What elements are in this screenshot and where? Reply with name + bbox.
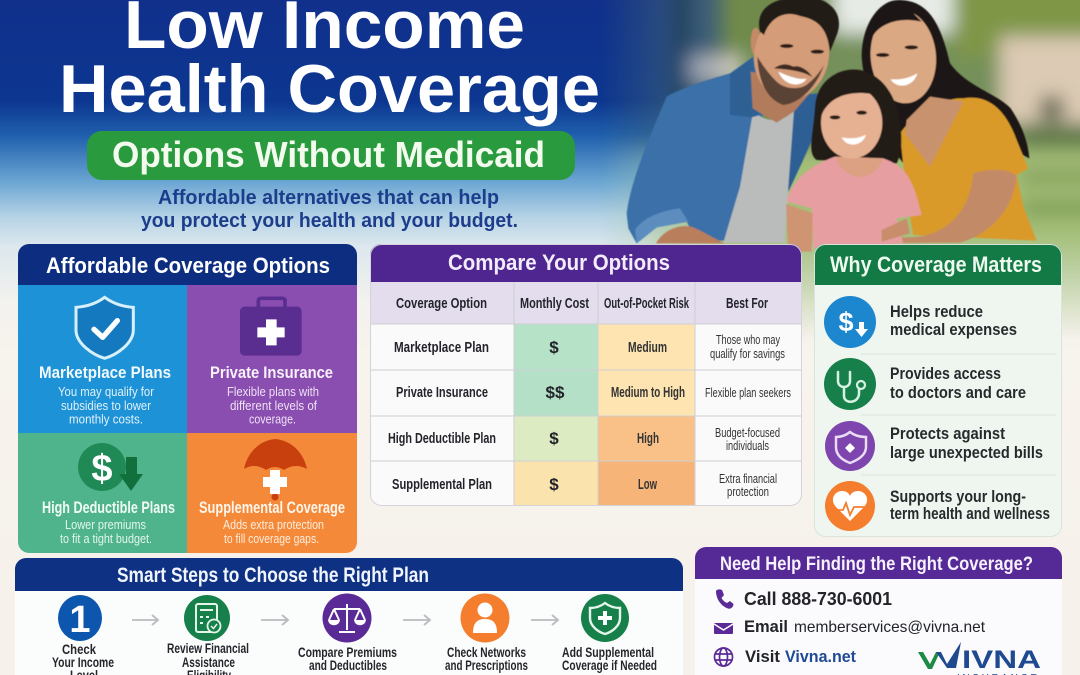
step 3: compare premiums: Compare Premiums bbox=[298, 645, 397, 660]
heading: affordable coverage options: Affordable Coverage Options bbox=[46, 253, 330, 278]
step 2: review assistance bbox=[167, 595, 249, 675]
text: visit bbox=[745, 647, 856, 666]
table row: high deductible plan: High Deductible Plan bbox=[388, 431, 496, 447]
icon: protective shield bbox=[825, 421, 875, 471]
arrow bbox=[531, 615, 558, 625]
heading: smart steps: Smart Steps to Choose the Right Plan bbox=[117, 564, 429, 587]
panel: smart steps bbox=[15, 558, 683, 675]
table header row: Out-of-Pocket Risk bbox=[604, 296, 690, 312]
photo: family outdoors bbox=[614, 0, 1080, 332]
woman bbox=[837, 0, 1037, 243]
card text: high deductible plans: Lower premiums bbox=[65, 517, 146, 532]
card text: private insurance: Private Insurance bbox=[210, 363, 333, 382]
text: email: memberservices@vivna.net bbox=[794, 619, 986, 636]
icon: reduce expenses: $ bbox=[838, 307, 854, 337]
icon: envelope bbox=[714, 623, 733, 634]
step 1: check income: 1 bbox=[69, 599, 91, 641]
icon: dollar with down arrow bbox=[78, 443, 143, 491]
card text: marketplace plans: You may qualify for bbox=[58, 384, 155, 399]
card text: supplemental coverage: Supplemental Coverage bbox=[199, 498, 345, 517]
step 1: check income bbox=[52, 595, 114, 675]
step 4: check networks: Check Networks bbox=[447, 645, 526, 660]
icon: heart with pulse bbox=[825, 481, 875, 531]
logo: vivna insurance bbox=[918, 642, 1041, 675]
icon: globe bbox=[714, 648, 732, 666]
text: email: Email bbox=[744, 617, 788, 636]
text: protects against bills: Protects against bbox=[890, 425, 1005, 443]
logo: vivna insurance: IVNA bbox=[962, 646, 1041, 674]
text: email bbox=[744, 617, 986, 636]
subtitle pill: Options Without Medicaid bbox=[112, 134, 545, 175]
text: reduce expenses bbox=[890, 303, 1017, 339]
title bbox=[59, 0, 600, 127]
icon: reduce expenses bbox=[824, 296, 876, 348]
table row: supplemental plan: Extra financial bbox=[719, 471, 777, 486]
panel outline bbox=[814, 244, 1062, 536]
step 1: check income: Check bbox=[62, 642, 96, 657]
table header row: Monthly Cost bbox=[520, 296, 589, 312]
table row: supplemental plan: $ bbox=[549, 475, 559, 494]
table row: private insurance: Flexible plan seekers bbox=[705, 385, 791, 400]
text: reduce expenses: Helps reduce bbox=[890, 303, 983, 321]
table header row: Best For bbox=[726, 296, 768, 312]
table header row bbox=[396, 296, 768, 312]
card text: marketplace plans: monthly costs. bbox=[69, 412, 143, 426]
card text: high deductible plans: High Deductible Plans bbox=[42, 498, 175, 517]
card text: high deductible plans bbox=[42, 498, 175, 546]
card text: marketplace plans bbox=[39, 363, 171, 426]
card text: marketplace plans: Marketplace Plans bbox=[39, 363, 171, 382]
table row: high deductible plan: Budget-focused bbox=[715, 425, 780, 440]
step 2: review assistance: Review Financial bbox=[167, 641, 249, 656]
card text: supplemental coverage: to fill coverage gaps. bbox=[224, 531, 319, 546]
card text: private insurance bbox=[210, 363, 333, 426]
arrow bbox=[261, 615, 288, 625]
table outline bbox=[370, 244, 802, 506]
panel: why coverage matters bbox=[814, 244, 1062, 537]
table row: marketplace plan: Those who may bbox=[716, 332, 780, 347]
girl bbox=[786, 69, 922, 252]
text: long-term health bbox=[890, 488, 1050, 523]
intro text bbox=[141, 187, 518, 232]
card text: private insurance: coverage. bbox=[249, 412, 296, 426]
table row: supplemental plan bbox=[392, 471, 777, 499]
step 5: add supplemental: Add Supplemental bbox=[562, 645, 654, 660]
intro text: Affordable alternatives that can help bbox=[158, 187, 499, 209]
panel: need help bbox=[695, 547, 1062, 675]
intro text: you protect your health and your budget. bbox=[141, 210, 518, 232]
text: visit: Visit bbox=[745, 647, 780, 666]
table row: marketplace plan bbox=[394, 332, 785, 361]
step 5: add supplemental bbox=[562, 594, 657, 673]
icon: umbrella with plus bbox=[244, 439, 307, 500]
step 3: compare premiums: and Deductibles bbox=[309, 658, 387, 673]
table row: private insurance bbox=[396, 383, 791, 402]
text: access to doctors: to doctors and care bbox=[890, 384, 1026, 402]
icon: phone bbox=[716, 589, 734, 609]
table row: private insurance: Private Insurance bbox=[396, 385, 488, 401]
card text: private insurance: different levels of bbox=[230, 398, 317, 413]
card text: marketplace plans: subsidies to lower bbox=[61, 398, 152, 413]
table row: marketplace plan: Marketplace Plan bbox=[394, 340, 489, 356]
step 2: review assistance: Assistance bbox=[182, 655, 235, 670]
table header row: Coverage Option bbox=[396, 296, 487, 312]
title: Health Coverage bbox=[59, 51, 600, 127]
text: access to doctors: Provides access bbox=[890, 365, 1001, 383]
card text: high deductible plans: to fit a tight budget. bbox=[60, 531, 152, 546]
text: visit: Vivna.net bbox=[785, 647, 856, 666]
card text: supplemental coverage bbox=[199, 498, 345, 546]
text: protects against bills: large unexpected bills bbox=[890, 444, 1043, 462]
text: protects against bills bbox=[890, 425, 1043, 462]
heading: compare your options: Compare Your Options bbox=[448, 250, 670, 275]
table row: supplemental plan: Low bbox=[638, 477, 657, 493]
step 5: add supplemental: Coverage if Needed bbox=[562, 658, 657, 673]
text: access to doctors bbox=[890, 365, 1026, 402]
table row: marketplace plan: qualify for savings bbox=[710, 346, 785, 361]
table row: marketplace plan: Medium bbox=[628, 340, 667, 356]
step 4: check networks bbox=[445, 594, 528, 673]
table row: high deductible plan: individuals bbox=[726, 438, 769, 453]
text: call: Call 888-730-6001 bbox=[744, 589, 892, 609]
table row: high deductible plan: $ bbox=[549, 429, 559, 448]
heading: why coverage matters: Why Coverage Matters bbox=[830, 252, 1042, 277]
table row: supplemental plan: protection bbox=[727, 484, 769, 499]
panel: affordable coverage options bbox=[18, 244, 357, 553]
icon: shield with check bbox=[76, 297, 133, 358]
icon: dollar with down arrow: $ bbox=[91, 448, 113, 490]
text: reduce expenses: medical expenses bbox=[890, 321, 1017, 339]
step 1: check income: Your Income bbox=[52, 655, 114, 670]
table row: marketplace plan: $ bbox=[549, 338, 559, 357]
card text: supplemental coverage: Adds extra protection bbox=[223, 517, 324, 532]
arrow bbox=[132, 615, 158, 625]
table row: supplemental plan: Supplemental Plan bbox=[392, 477, 492, 493]
table row: high deductible plan bbox=[388, 425, 780, 453]
icon: stethoscope bbox=[824, 358, 876, 410]
card text: private insurance: Flexible plans with bbox=[227, 384, 319, 399]
text: long-term health: Supports your long- bbox=[890, 488, 1026, 506]
step 4: check networks: and Prescriptions bbox=[445, 658, 528, 673]
table row: private insurance: Medium to High bbox=[611, 385, 685, 401]
table row: private insurance: $$ bbox=[546, 383, 565, 402]
table row: high deductible plan: High bbox=[637, 431, 659, 447]
man bbox=[627, 0, 839, 243]
heading: need help: Need Help Finding the Right Coverage? bbox=[720, 553, 1033, 575]
panel: compare your options bbox=[370, 244, 802, 506]
arrow bbox=[403, 615, 430, 625]
icon: medical case bbox=[240, 298, 302, 356]
step 3: compare premiums bbox=[298, 594, 397, 673]
